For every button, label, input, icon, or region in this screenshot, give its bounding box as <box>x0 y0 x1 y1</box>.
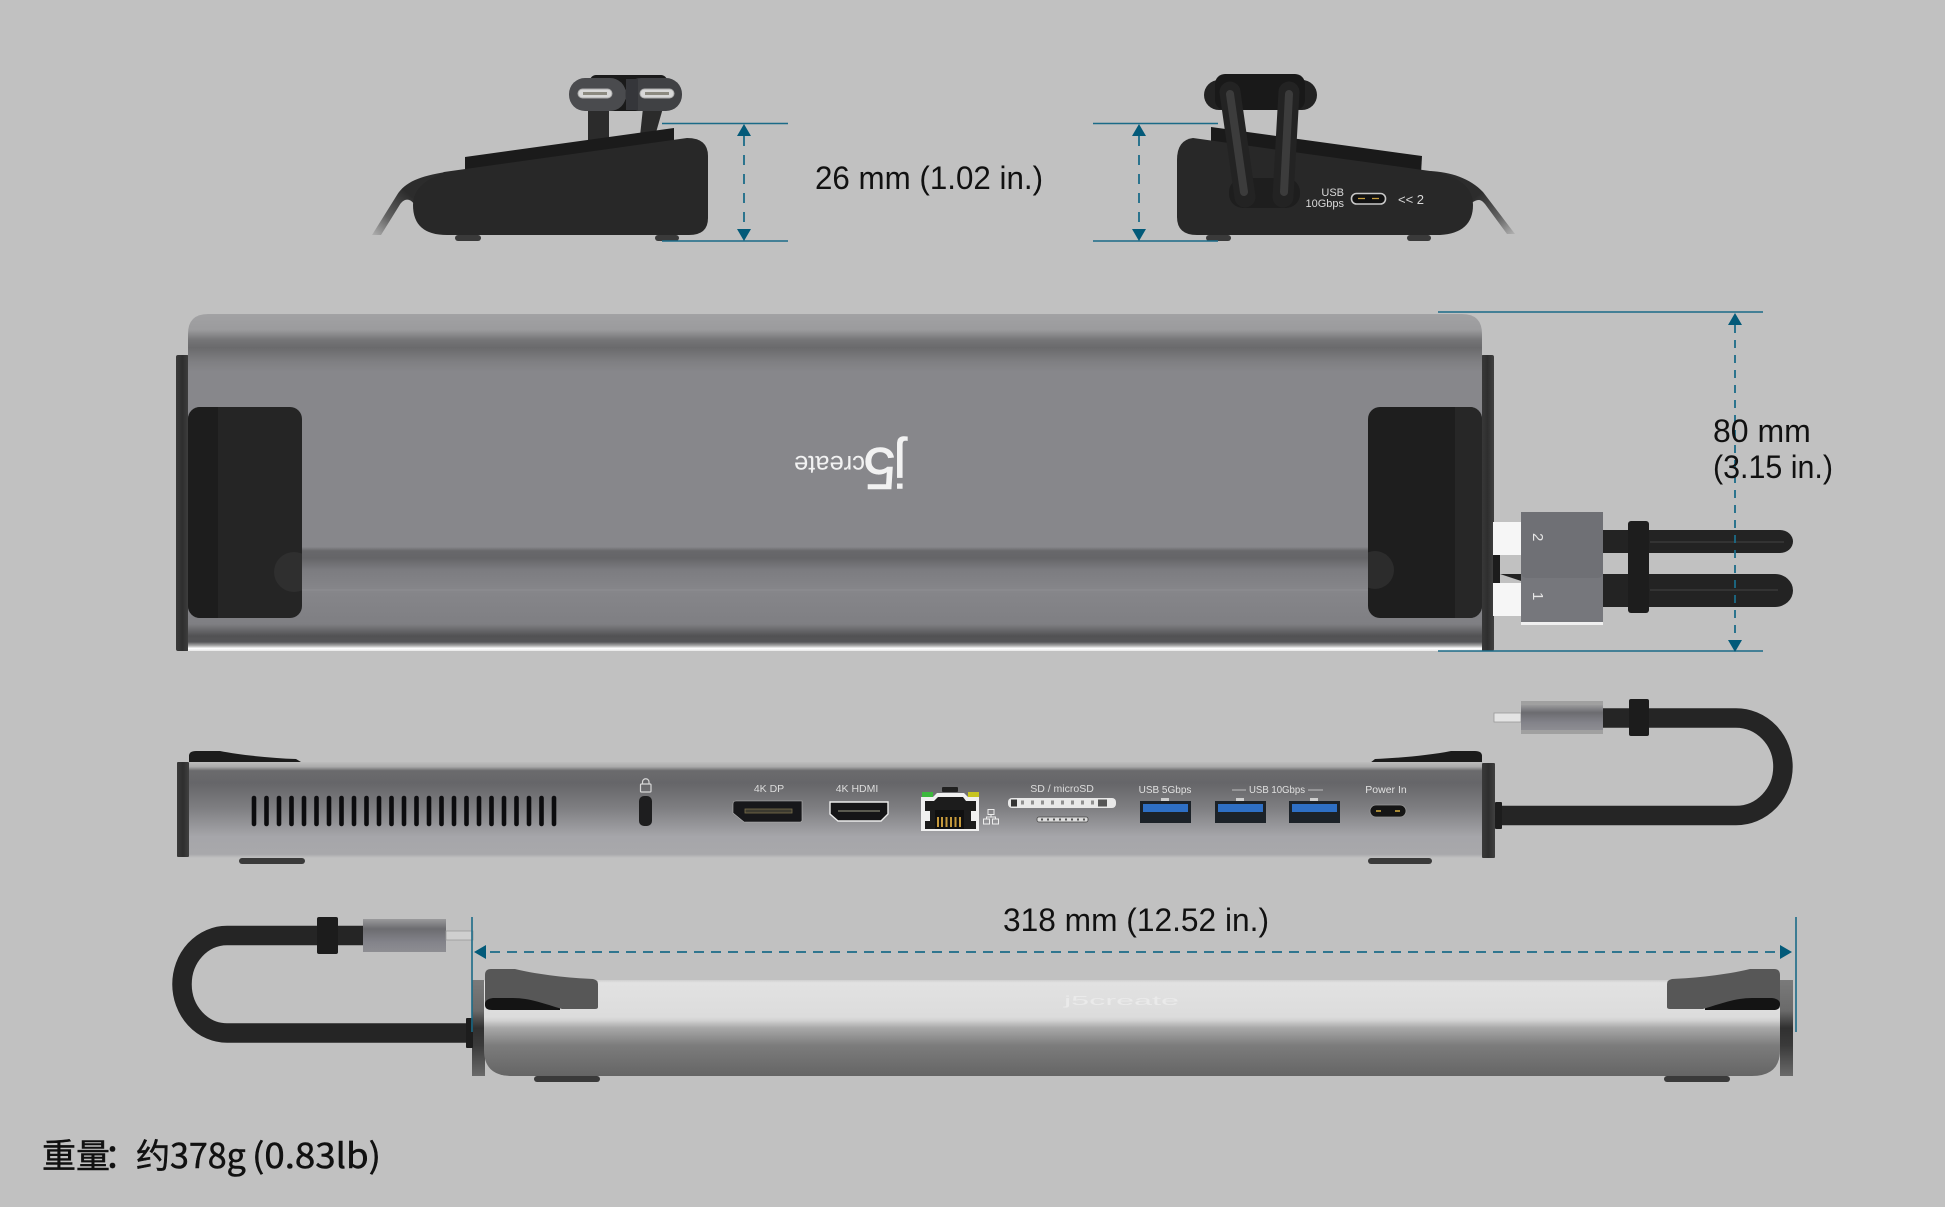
feet <box>534 1076 1730 1082</box>
body <box>484 980 1780 1076</box>
faint logo: j5create <box>1062 993 1179 1008</box>
weight label: 重量 <box>42 1129 110 1178</box>
label USB 10Gbps with bracket: USB 10Gbps <box>1249 785 1305 796</box>
SD card slot <box>1008 798 1116 808</box>
white metal tips <box>1493 522 1522 616</box>
label: 80 mm: (3.15 in.) <box>1713 449 1833 485</box>
j5create logo upside down: j <box>894 436 908 499</box>
USB-A port 2 <box>1215 798 1266 823</box>
USB-A port 1 <box>1140 798 1191 823</box>
cable <box>182 936 472 1033</box>
width dimension 80 mm <box>1438 312 1763 652</box>
label USB 5Gbps: USB 5Gbps <box>1139 785 1191 796</box>
cable collar <box>466 1018 473 1048</box>
label Power In: Power In <box>1365 784 1407 796</box>
cable collar <box>1495 802 1502 829</box>
security slot <box>639 796 652 826</box>
network icon <box>984 810 998 824</box>
connector back <box>1204 74 1317 110</box>
top pads <box>189 751 1482 763</box>
plug metal tip <box>1494 713 1521 722</box>
feet <box>455 235 679 241</box>
port count: << 2 <box>1398 192 1424 207</box>
label 4K HDMI: 4K HDMI <box>836 783 878 795</box>
feet <box>239 858 1432 864</box>
lower cable loop <box>1500 574 1793 607</box>
end caps <box>472 980 1793 1076</box>
body <box>413 138 708 235</box>
body <box>188 762 1483 858</box>
weight label: 约378g <box>136 1129 246 1178</box>
ventilation slots <box>254 798 554 824</box>
weight label: ： <box>104 1129 138 1178</box>
left rubber pad <box>485 969 598 1010</box>
top plate <box>465 128 674 174</box>
DisplayPort port <box>733 801 802 822</box>
aluminium body <box>188 314 1482 651</box>
height dimension right <box>1093 124 1218 241</box>
lock icon <box>640 779 651 792</box>
label USB 10Gbps with bracket <box>1232 785 1323 796</box>
plug metal tip <box>446 931 473 940</box>
cable <box>1498 718 1783 816</box>
cable tail right <box>1430 171 1515 234</box>
upper cable loop <box>1600 530 1793 553</box>
right rubber pad <box>1667 969 1780 1010</box>
loop highlights <box>1650 542 1784 590</box>
weight label: (0.83lb) <box>252 1129 381 1178</box>
USB-C port <box>1352 194 1386 204</box>
cable band <box>1629 699 1649 736</box>
rear view cable and USB-C plug <box>182 917 473 1048</box>
top view of dock <box>176 314 1494 651</box>
Power In USB-C port <box>1370 805 1406 817</box>
left end side view of dock <box>372 75 708 241</box>
end caps <box>176 355 1494 651</box>
rear view of dock <box>472 969 1793 1082</box>
white edge <box>1521 622 1603 625</box>
body <box>1177 138 1473 235</box>
dual USB-C connectors with looped cables <box>1493 512 1793 625</box>
j5create logo upside down: create <box>794 450 865 480</box>
connector housing lower <box>1521 560 1603 622</box>
label: 26 mm: 26 mm (1.02 in.) <box>815 160 1043 196</box>
left black pad <box>188 407 314 618</box>
front view cable and USB-C plug <box>1494 699 1783 829</box>
cable socket <box>1229 178 1300 208</box>
end caps <box>177 762 1495 858</box>
j5create logo upside down: 5 <box>863 435 896 501</box>
front view of dock with ports <box>177 751 1495 864</box>
label SD / microSD: SD / microSD <box>1030 783 1094 795</box>
j5create logo upside down <box>794 435 908 501</box>
connector head with two USB-C plugs <box>569 75 682 111</box>
HDMI port <box>830 802 888 821</box>
cable loops <box>1230 92 1289 197</box>
length dimension 318 mm <box>472 917 1796 1032</box>
connector housing upper <box>1521 512 1603 578</box>
cable band <box>317 917 338 954</box>
right end side view of dock <box>1177 74 1515 241</box>
plug housing <box>363 919 446 952</box>
RJ45 Ethernet port <box>921 787 979 831</box>
cable tie band <box>1628 521 1649 613</box>
label 4K DP: 4K DP <box>754 783 784 795</box>
height dimension left <box>662 124 788 241</box>
label: 80 mm: 80 mm <box>1713 413 1811 449</box>
subtle crease <box>302 589 1368 591</box>
USB 10Gbps label: 10Gbps <box>1305 198 1344 210</box>
connector cables <box>588 108 663 140</box>
plug housing <box>1521 701 1603 734</box>
port number 2: 2 <box>1529 533 1546 541</box>
top plate <box>1211 127 1422 174</box>
USB 10Gbps label: USB <box>1321 187 1344 199</box>
small inner black joint <box>1493 555 1500 583</box>
cable tail left <box>372 172 446 235</box>
USB-A port 3 <box>1289 798 1340 823</box>
microSD slot <box>1037 817 1088 822</box>
feet <box>1206 235 1431 241</box>
right black pad <box>1356 407 1482 618</box>
label: 318 mm: 318 mm (12.52 in.) <box>1003 902 1269 938</box>
port number 1: 1 <box>1529 592 1546 600</box>
